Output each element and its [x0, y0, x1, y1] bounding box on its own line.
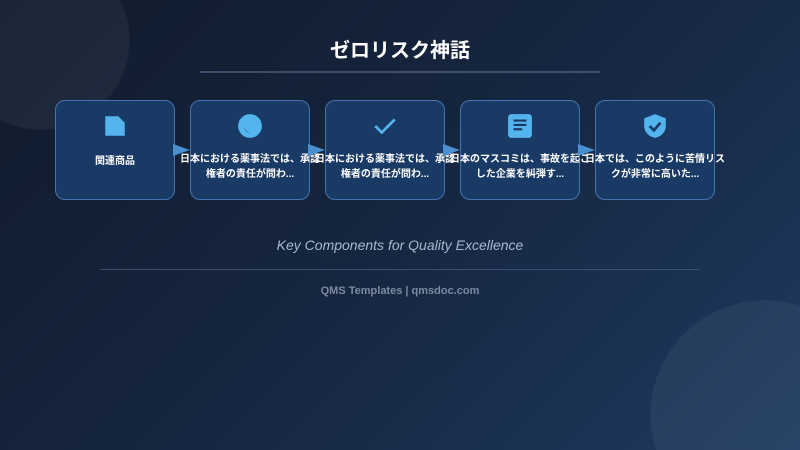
card 5 [595, 100, 715, 200]
title: ゼロリスク神話 [330, 40, 470, 62]
card 3: 日本における薬事法では、承認 [315, 154, 455, 165]
card 5: クが非常に高いた... [611, 169, 699, 180]
arrow 4 [578, 144, 595, 156]
subtitle: Key Components for Quality Excellence [277, 237, 523, 253]
card 3 [325, 100, 445, 200]
arrow 1 [173, 144, 190, 156]
icon: file [105, 116, 125, 136]
card 5: 日本では、このように苦情リス [585, 154, 725, 165]
card 2 [190, 100, 310, 200]
arrow 3 [443, 144, 460, 156]
card 1 [55, 100, 175, 200]
card 4: した企業を糾弾す... [476, 169, 564, 180]
card 1: 関連商品 [95, 156, 135, 167]
icon: globe [238, 114, 262, 138]
card 2: 権者の責任が問わ... [206, 169, 294, 180]
card 4 [460, 100, 580, 200]
card 2: 日本における薬事法では、承認 [180, 154, 320, 165]
icon: document [508, 114, 532, 138]
footer: QMS Templates | qmsdoc.com [321, 285, 479, 297]
icon: check [374, 118, 396, 134]
card 4: 日本のマスコミは、事故を起こ [450, 154, 590, 165]
icon: shield [644, 114, 666, 138]
arrow 2 [308, 144, 325, 156]
card 3: 権者の責任が問わ... [341, 169, 429, 180]
